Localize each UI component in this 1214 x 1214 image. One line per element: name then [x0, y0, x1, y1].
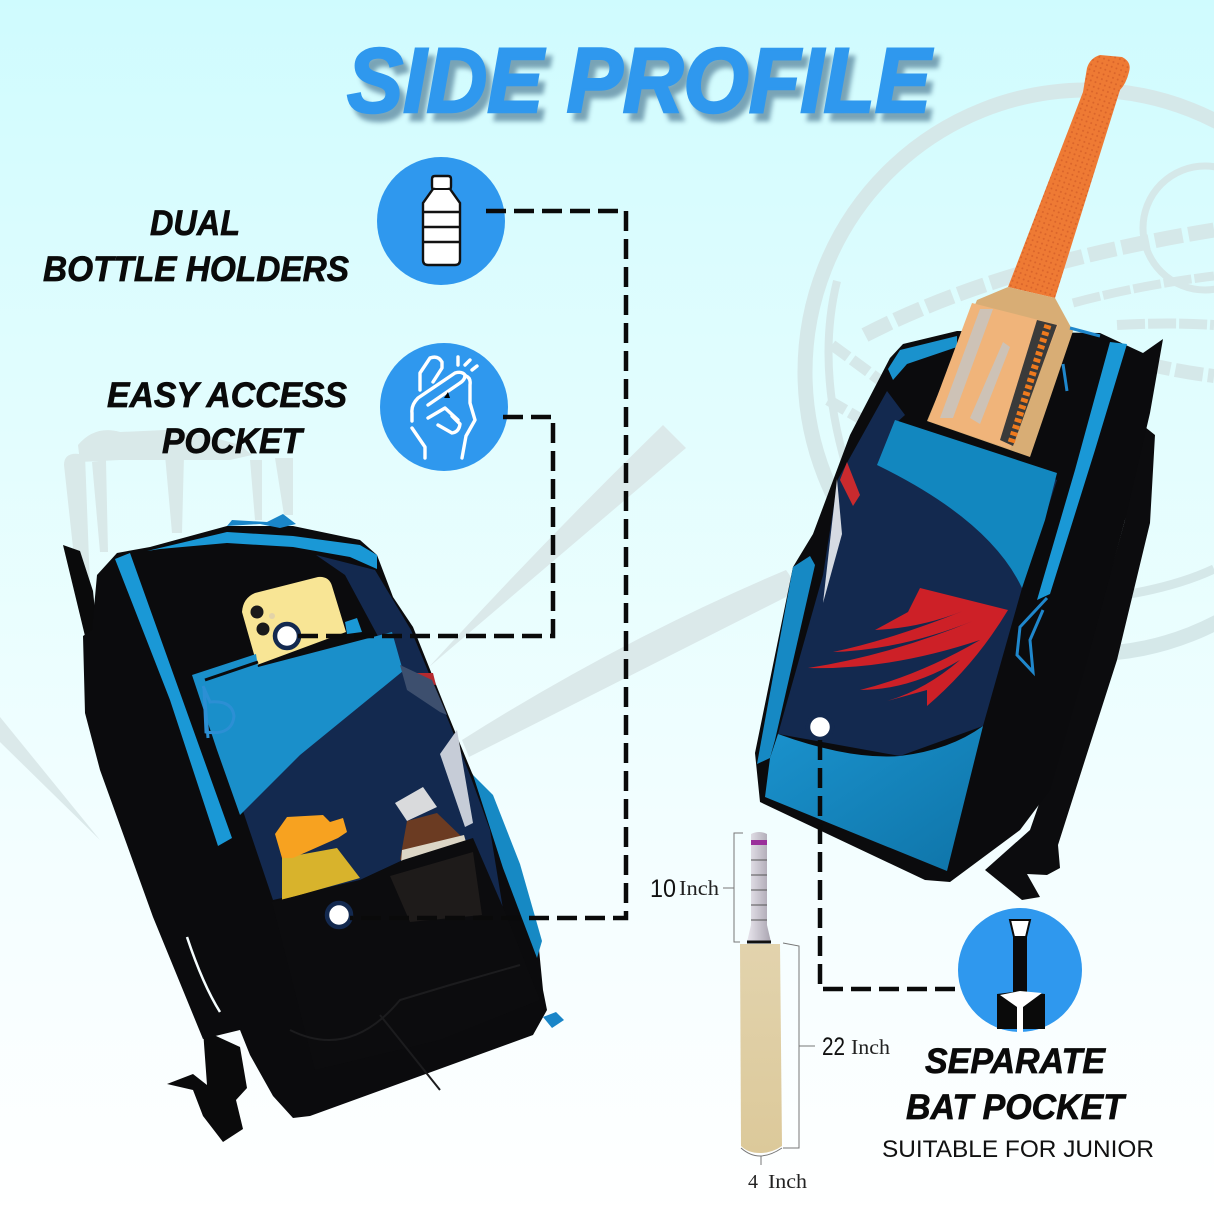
grey navy blotch — [400, 665, 447, 715]
junior bat diagram: 22 — [822, 1033, 845, 1061]
label: dual bottle holders: BOTTLE HOLDERS — [43, 250, 349, 289]
red streak — [840, 462, 860, 506]
navy front panel — [778, 391, 1057, 756]
phone — [242, 577, 346, 665]
strap gap — [187, 937, 220, 1012]
label: separate bat pocket: SEPARATE — [925, 1042, 1107, 1081]
label: easy access pocket — [107, 376, 347, 461]
bat handle and blade — [927, 55, 1130, 457]
junior bat diagram — [650, 832, 891, 1193]
top blue strip — [147, 532, 377, 569]
cord — [1017, 598, 1047, 672]
blue top pocket — [877, 420, 1057, 588]
blue side panel — [473, 775, 542, 958]
left backpack — [63, 514, 564, 1142]
stumps — [64, 454, 293, 612]
blue zip strip — [1037, 342, 1127, 600]
junior bat diagram: Inch — [768, 1171, 807, 1193]
top strap tab — [63, 545, 97, 636]
red logo — [808, 588, 1008, 706]
junior bat diagram: Inch — [851, 1035, 891, 1059]
clear bottle — [395, 787, 466, 863]
white stripes — [440, 730, 473, 827]
blue pocket — [192, 618, 403, 815]
bottom strap — [167, 1030, 247, 1142]
label: dual bottle holders: DUAL — [150, 204, 240, 243]
small cord near bat — [1063, 328, 1100, 391]
title: SIDE PROFILE — [353, 38, 939, 140]
marker: phone — [275, 624, 299, 648]
label: easy access pocket: POCKET — [162, 422, 305, 461]
blue top strip — [888, 336, 957, 380]
connector: bottle holders — [350, 211, 626, 918]
mesh pocket — [272, 838, 540, 1070]
orange bottle — [275, 815, 360, 900]
title: SIDE PROFILE — [347, 30, 933, 132]
label: dual bottle holders — [43, 204, 349, 289]
junior bat diagram: 10 — [650, 875, 676, 903]
background cricket motif — [0, 90, 1214, 840]
red patch — [407, 673, 436, 685]
icon: bat pocket — [958, 908, 1082, 1032]
white streak — [823, 479, 842, 603]
marker: bottle — [327, 903, 351, 927]
bat wedges — [429, 425, 686, 667]
bottom blue panel — [765, 726, 983, 871]
navy side panel — [243, 555, 503, 909]
main body — [83, 526, 547, 1118]
main body — [755, 331, 1163, 882]
label: separate bat pocket: BAT POCKET — [906, 1088, 1127, 1127]
marker: bat pocket — [808, 715, 832, 739]
blue zip strip — [115, 553, 232, 846]
label: easy access pocket: EASY ACCESS — [107, 376, 347, 415]
right backpack — [755, 55, 1163, 900]
connector: bat pocket — [820, 740, 965, 989]
connector: access pocket — [298, 417, 553, 636]
blue left side — [757, 556, 815, 764]
label: separate bat pocket — [906, 1042, 1127, 1127]
zipper cord — [203, 686, 234, 738]
top zip tab — [227, 514, 296, 528]
junior bat diagram: 4 — [748, 1171, 758, 1193]
junior bat diagram: Inch — [679, 876, 720, 900]
icon: fingers snap — [380, 343, 508, 471]
back strap — [985, 415, 1155, 900]
subtitle: suitable for junior: SUITABLE FOR JUNIOR — [882, 1136, 1154, 1163]
tab bottom right — [543, 1012, 564, 1028]
icon: bottle — [377, 157, 505, 285]
